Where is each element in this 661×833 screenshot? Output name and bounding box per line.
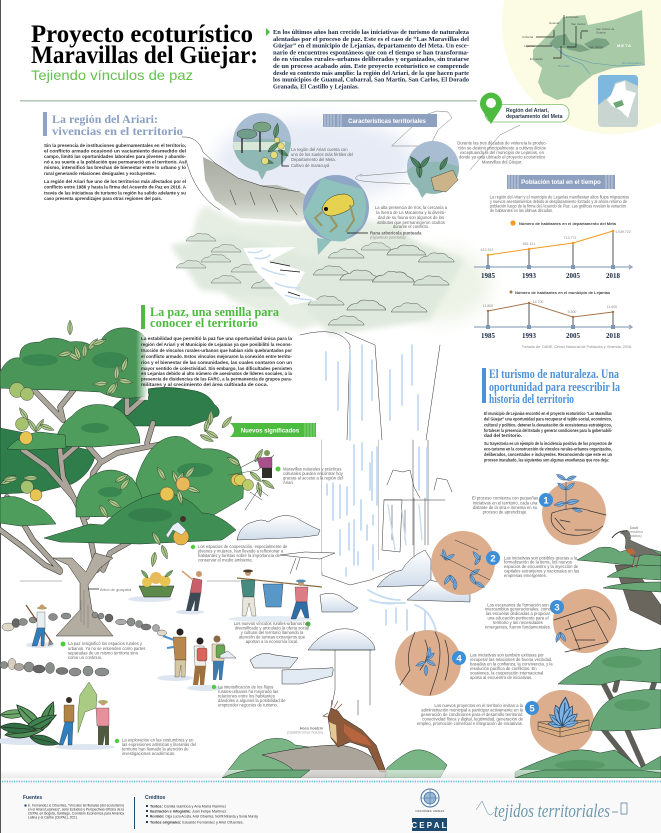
intro text: alentadas por el proceso de paz. Este es el caso de “Las Maravillas del [273, 36, 469, 43]
caption [504, 556, 579, 578]
text: población: La región del Ariari y el municipio de Lejanías manifiestan altos flujos migratorios [490, 194, 629, 200]
text: La región del Ariari: caso presenta aprendizajes para otras regiones del país. [44, 196, 163, 202]
step 4 [395, 630, 553, 696]
caption: intercambios generacionales, como [485, 606, 552, 612]
caption: ríos: durante el conflicto. [393, 224, 429, 229]
chart: Lejanías [474, 290, 632, 349]
tejidos territoriales logo: tejidos territoriales [494, 801, 610, 822]
caption: Los nuevos proyectos en el territorio invitan a la [434, 703, 524, 708]
map: rivers [552, 45, 645, 74]
caption: guava tree: Árbol de guayaba [100, 587, 132, 592]
values: 412.312 [481, 248, 493, 252]
plant [554, 473, 583, 514]
caption: proceso de aprendizaje. [483, 510, 527, 514]
caption: maravillas: culturales pueden encontrar hoy [283, 471, 344, 476]
clouds outlines [355, 111, 520, 184]
créditos: Textos originales: Eduardo Fernández y Ariel Cifuentes. [150, 820, 244, 824]
years [481, 332, 620, 340]
step 5 [417, 690, 594, 754]
years: 1985 [481, 332, 496, 340]
CEPAL logo [411, 818, 449, 831]
caption: Los escenarios de formación son [487, 602, 549, 608]
caption: aporta al encuentro de iniciativas. [470, 675, 532, 680]
caption: empresas emergentes. [504, 573, 547, 578]
créditos [145, 795, 258, 824]
caption: ríos [375, 205, 448, 229]
fuentes: en el Ariari (Lejanías)”, serie Estudios y Perspectivas-Oficina de la [28, 808, 125, 812]
caption: décadas de violencia: exceptuando la del municipio de Lejanías, en [460, 150, 545, 155]
intro text [266, 28, 470, 90]
title [31, 19, 258, 83]
caption: El proceso comienza con pequeñas [472, 496, 538, 500]
values: 9.300 [568, 310, 576, 314]
map: labels: El Dorado [566, 15, 579, 19]
map: labels: San Carlos [571, 22, 586, 26]
caption: intensificación: La intensificación de los flujos [218, 684, 273, 690]
caption: vínculos: Los nuevos vínculos rurales-urbanos han [234, 621, 311, 626]
text: La paz: rios y el bienestar de las comunidades, las cuales contaron con un [141, 360, 292, 366]
person digging [26, 604, 54, 646]
caption: maravillas [276, 466, 344, 485]
map: Ariari region [549, 34, 590, 52]
heading: La región del Ariari: vivencias en el territorio [52, 124, 183, 138]
lower hills [190, 205, 430, 330]
intro text: do en vínculos rurales–urbanos deliberados y organizados, sin tratarse [273, 56, 469, 63]
person in purple [257, 450, 272, 478]
basket of guavas [139, 569, 174, 597]
map: Colombia inset [598, 75, 638, 127]
intro text: desde su contexto más amplio: la región del Ariari, de la que hacen parte [273, 70, 469, 77]
footer [1, 770, 661, 833]
title: Maravillas del Güejar: [31, 40, 258, 69]
caption: resignificó: separadas de un mismo territorio sino [68, 650, 139, 656]
caption: una educación pertinente para el [488, 616, 549, 620]
caption: vínculos: diversificado y articulado la oferta social [235, 626, 309, 630]
ibis tree [577, 526, 661, 625]
badge [452, 651, 466, 665]
years: 2005 [566, 272, 580, 280]
map: labels: San Martín [589, 45, 604, 49]
créditos: Ilustración e infografía: Juan Felipe Martínez [150, 810, 226, 814]
pin label: Región del Ariari, [506, 108, 549, 114]
banner: características territoriales [323, 114, 437, 127]
axis [474, 325, 632, 329]
text: El turismo: dad del territorio. [484, 433, 523, 439]
text: El turismo: Su trayectoria es un ejemplo de la incidencia positiva de los proyectos de [484, 441, 612, 447]
step 1 [472, 473, 606, 545]
text: La paz: en Lejanías debido al alto número de asesinatos de líderes sociales, a la [141, 371, 292, 377]
CEPAL logo: CEPAL [411, 821, 449, 830]
caption: exploración [115, 738, 196, 756]
caption: intensificación: dándoles a algunos la posibilidad de [218, 698, 286, 703]
caption: resignificó: urbanos. Ya no se entienden como partes [68, 646, 145, 651]
caption: intensificación: relaciones entre los habitantes [218, 694, 275, 698]
step 2 [431, 531, 579, 595]
text: La región del Ariari [44, 143, 187, 202]
caption: maravillas: gracias al acceso a la región del [283, 476, 343, 480]
caption: cooperación [191, 544, 288, 562]
years: 2005 [566, 332, 580, 340]
caption: hoatzin [287, 726, 324, 734]
small rocks with plants [220, 488, 268, 658]
chart: Meta [474, 220, 632, 280]
caption: espacios de encuentro y la inyección de [504, 564, 579, 569]
ibis label: Coclí [630, 526, 639, 530]
banner: población total: Población total en el tiempo [521, 180, 601, 186]
caption: vínculos: aportan a la economía local. [246, 639, 298, 644]
circle: cultivos [233, 113, 353, 180]
page edge [0, 0, 1, 833]
map: labels: Río Guayabero [622, 61, 642, 65]
lower right tree [515, 648, 661, 778]
ibis bird [612, 530, 661, 568]
text: El turismo: cultural y político, detener la devastación de ecosistemas estratégicos, [484, 422, 612, 428]
illustration: waterfall [237, 332, 470, 715]
caption: resignificó: como un continuo. [68, 655, 102, 660]
caption [470, 652, 553, 680]
text: La región del Ariari: La región del Ariari fue uno de los territorios más afectados por el [44, 179, 187, 185]
text: La paz: militares y al crecimiento del área cultivada de coca. [141, 382, 269, 388]
large leaves plant [0, 700, 60, 748]
hikers [193, 636, 225, 685]
legend: Número de habitantes en el departamento del Meta [519, 221, 617, 226]
map: labels: Lejanías [524, 44, 535, 48]
hoatzin bird [323, 700, 386, 772]
ibis label [625, 526, 643, 538]
caption: recuperar las relaciones de buena vecindad, [470, 657, 552, 662]
title: Proyecto ecoturístico [31, 19, 253, 48]
pin label [485, 104, 569, 122]
heading: La paz: conocer el territorio [150, 316, 258, 330]
map: labels: Guaroa [596, 30, 606, 34]
caption: generación de condiciones para el desarrollo territorial: [421, 712, 523, 717]
text: El turismo: eco-turismo en la construcción de vínculos rurales-urbanos organizados, [484, 446, 612, 452]
fuentes [23, 795, 125, 820]
caption [472, 496, 538, 514]
caption: resolución pacífica de conflictos. En [470, 666, 537, 671]
banner: población total [507, 175, 615, 189]
caption: Las iniciativas son también exitosas por [470, 652, 544, 658]
trunk [53, 553, 113, 636]
caption: las escuelas dedicadas a propiciar [486, 611, 551, 616]
river pools [368, 590, 437, 635]
caption: intensificación: rurales-urbanos ha mejorado las [218, 689, 278, 694]
heading: El turismo: oportunidad para reescribir la [489, 379, 620, 394]
caption: basadas en la confianza, la convivencia, y la [470, 662, 553, 666]
years: 2018 [606, 272, 620, 280]
intro text: de un proceso acabado aún. Este proyecto ecoturístico se comprende [273, 63, 469, 70]
years: 2018 [606, 332, 620, 340]
person with guava [166, 516, 186, 538]
circle: frog [303, 175, 422, 255]
leader line [282, 150, 289, 166]
intro text: nario de encuentros espontáneos que con el tiempo se han transforma- [273, 49, 469, 56]
map: labels: Cubarral [522, 35, 533, 39]
text: La región del Ariari: nó a su suerte a la población que permaneció en el territorio. Así [44, 159, 187, 165]
caption: ríos: la Sierra de La Macarena y la diversi- [376, 210, 446, 215]
intro text: los municipios de Guamal, Cubarral, San Martín, San Carlos, El Dorado [273, 77, 469, 84]
map: labels: Guamal [549, 21, 559, 25]
values: 713.772 [564, 236, 576, 240]
badge: 2 [490, 554, 496, 564]
illustration: upper landscape [170, 111, 520, 335]
caption: emergentes, fueron fundamentales. [485, 624, 551, 630]
caption: cooperación: habitantes y turistas sobre la importancia de [198, 553, 281, 558]
rocks and clouds [237, 515, 320, 540]
map panel [502, 0, 661, 134]
badge [486, 551, 500, 565]
caption: décadas de violencia: donde ya está ubicado el proyecto ecoturístico [459, 154, 546, 160]
text: El turismo: deliberados, concertados e incluyentes. Reconociendo que este es un [484, 452, 612, 458]
text: La paz: el conflicto armado. Estos vínculos mejoraron la conexión entre territo- [141, 354, 292, 360]
caption [485, 602, 552, 630]
years: 1993 [522, 332, 536, 340]
location pin [480, 93, 569, 124]
caption: Las iniciativas son posibles gracias a la [504, 556, 578, 560]
text: La región del Ariari: campo, limitó las oportunidades laborales para jóvenes y abando- [44, 154, 186, 160]
caption: resignificó: La paz resignificó los espacios rurales y [68, 641, 143, 646]
fuentes: Latina y el Caribe (CEPAL), 2021. [28, 816, 78, 820]
caption: cultivos: La región del Ariari cuenta con [291, 147, 348, 152]
seedbed [538, 720, 589, 737]
person arms up [182, 571, 202, 611]
caption: intensificación [212, 684, 286, 708]
heading: El turismo [482, 366, 620, 406]
years [481, 272, 620, 280]
frog label: Rana arborícola punteada [370, 230, 422, 236]
fuentes: CEPAL en Bogotá, Santiago, Comisión Económica para América [28, 812, 125, 816]
text: La paz: región del Ariari y el Municipio de Lejanías ya que posibilitó la recons- [141, 342, 292, 348]
text: La región del Ariari: conflicto entre 1986 y hasta la firma del Acuerdo de Paz en 2016. A [44, 185, 186, 191]
circle: plant basket [407, 141, 459, 198]
intro text: Granada, El Castillo y Lejanías. [273, 83, 359, 90]
guava fruits [10, 382, 254, 545]
step 3 [485, 589, 617, 653]
caption: iniciativas en el territorio, cada una [473, 500, 538, 506]
text fade [136, 326, 148, 400]
caption: hoatzin: Hoco hoatzin [300, 726, 324, 730]
text: La paz: presencia de disidencias de las FARC, a la permanencia de grupos para- [141, 376, 292, 382]
caption: cultivos [291, 147, 353, 168]
map: labels: El Castillo [530, 57, 543, 61]
line [488, 303, 613, 317]
values: 14.700 [533, 300, 543, 304]
caption: cultivos: Cultivo de maracuyá [291, 163, 330, 168]
caption: distante de la otra e inmersa en su [473, 505, 538, 510]
foliage front [0, 328, 146, 398]
river [243, 247, 318, 305]
heading: La región del Ariari: La región del Ariari: [52, 112, 158, 126]
caption: décadas de violencia: ción se destinó principalmente a cultivos ilícitos [458, 146, 546, 150]
text: población: población luego de la firma del Acuerdo de Paz. Las gráficas revelan la variación [490, 204, 627, 208]
heading: El turismo: El turismo de naturaleza. Una [489, 366, 619, 381]
heading: La paz: La paz, una semilla para [150, 305, 280, 319]
right tier rock [382, 470, 452, 560]
values: 11.800 [483, 304, 493, 308]
caption: resignificó [60, 641, 145, 660]
créditos: Revisión: Olga Lucía Acosta, Ariel Cifuentes, Nohfli Miranda y Sonia Murray [150, 814, 258, 818]
plants [440, 540, 490, 590]
banner: nuevos significados: Nuevos significados [241, 428, 300, 434]
badge: 1 [543, 496, 549, 506]
caption: maravillas: Maravillas naturales y prácticas [283, 466, 341, 472]
caption: cooperación: Los espacios de cooperación, especialmente de [198, 544, 288, 549]
people with leaf [59, 682, 109, 745]
heading: La región del Ariari [43, 112, 183, 138]
illustration: guava tree [0, 320, 276, 636]
intro text: Güejar” en el municipio de Lejanías, departamento del Meta. Un esce- [273, 43, 469, 50]
caption: ocasiones, la cooperación internacional [470, 670, 543, 676]
pin label: departamento del Meta [506, 114, 563, 120]
map: San Martín zone [584, 38, 610, 49]
text: La paz: mayor sentido de colectividad. Sin embargo, las dificultades persisten [141, 366, 292, 372]
caption: cultivos: uno de los suelos más fértiles del [291, 152, 353, 157]
caption: conectividad física y digital, legitimidad, generación de [422, 716, 524, 722]
map: labels: San Carlos de [596, 27, 615, 31]
ibis label: caudatus) [626, 534, 642, 538]
caption: exploración: investigaciones académicas. [122, 751, 175, 756]
caption: cooperación: conservar el medio ambiente. [198, 558, 253, 562]
bottom centre trees with hoatzin [222, 700, 447, 778]
stones [0, 612, 166, 676]
map: labels: META [617, 43, 632, 48]
caption: intensificación: emprender negocios de turismo. [218, 702, 278, 708]
branches [0, 382, 167, 572]
ground lines and shadows [0, 581, 312, 750]
caption: vínculos [234, 621, 311, 644]
caption: décadas de violencia: Durante las tres décadas de violencia la produc- [457, 140, 547, 146]
text: La región del Ariari: rural generando relaciones desiguales y excluyentes. [44, 171, 157, 177]
water streaks [326, 345, 427, 576]
caption: capitales extranjeros y nacionales en las [504, 568, 579, 574]
header divider [20, 100, 477, 102]
badge [525, 701, 539, 715]
caption: décadas de violencia: Maravillas del Güejar. [482, 160, 522, 164]
cliffs [300, 332, 440, 585]
text: El turismo: proceso inacabado, las siguientes son algunas enseñanzas que nos deja: [484, 458, 609, 464]
caption: hoatzin: (Opisthocomus hoazin) [287, 730, 323, 734]
banner: nuevos significados [230, 423, 316, 437]
carriers with bucket [237, 570, 322, 619]
text: población: y nuevos asentamientos debido al desplazamiento forzado y al ahora retorno de [490, 199, 628, 204]
subtitle: Tejiendo vínculos de paz [31, 67, 193, 83]
text: La región del Ariari: mismo, intensificó las brechas de bienestar entre lo urbano y lo [44, 165, 186, 171]
caption: vínculos: atención de turistas extranjeros que [239, 634, 306, 640]
fuentes: E. Fernández & Cifuentes, “Vínculos territoriales (del ecoturismo) [28, 804, 124, 808]
caption: exploración: territorio han llamado la atención de [122, 746, 189, 752]
map: labels: Río Ariari [558, 64, 570, 68]
badge: 4 [456, 654, 462, 664]
map: labels [522, 15, 642, 68]
caption: exploración: las expresiones artísticas y literarias del [122, 742, 196, 747]
line [488, 231, 613, 255]
heading: La paz [141, 305, 280, 330]
ibis label: (Theristicus [625, 530, 643, 534]
low rocks [250, 653, 298, 668]
text: La paz: La estabilidad que permitió la paz fue una oportunidad única para la [141, 336, 292, 342]
caption: cooperación: jóvenes y mujeres, han llevado a reflexionar a [197, 548, 284, 554]
foliage back [108, 387, 219, 426]
text: El turismo: fortalecer la presencia del Estado y generar condiciones para la gobernabili- [484, 428, 612, 434]
values [481, 230, 631, 252]
caption: exploración: La exploración en las costumbres y en [122, 738, 194, 742]
caption: ríos: dad de su fauna son algunos de los [378, 215, 444, 220]
UN logo: NACIONES UNIDAS [416, 809, 444, 813]
caption: territorio y las necesidades [493, 620, 543, 625]
caption: formalización de la tierra, los nuevos [504, 560, 572, 564]
values: 561.121 [523, 242, 535, 246]
axis [474, 265, 632, 269]
guide [163, 628, 186, 677]
caption: cultivos: Departamento del Meta. [291, 157, 336, 162]
UN logo [416, 789, 444, 813]
fuentes: Fuentes [23, 795, 42, 801]
map: municipality leaders [526, 15, 588, 58]
source: Tomado de: DANE, Censo Nacional de Población y Vivienda, 2018. [522, 345, 632, 349]
text: La región del Ariari: Sin la presencia de instituciones gubernamentales en el territorio, [44, 143, 187, 149]
values: 11.600 [607, 305, 617, 309]
values [483, 300, 617, 314]
créditos: Créditos [145, 795, 166, 801]
banner: características territoriales: Características territoriales [348, 119, 427, 125]
years: 1985 [481, 272, 496, 280]
caption: administración municipal a participar activamente en la [421, 708, 524, 712]
text: El turismo: El municipio de Lejanías encontró en el proyecto ecoturístico “Las Maravillas [484, 411, 612, 417]
frog leader [347, 232, 368, 234]
years: 1993 [522, 272, 536, 280]
caption: ríos: La alta presencia de ríos, la cercanía a [375, 205, 448, 210]
text: El turismo [484, 411, 612, 464]
caption: maravillas: Ariari. [283, 480, 294, 485]
mountain ridge line [182, 137, 300, 215]
caption [417, 703, 524, 726]
text: población [490, 194, 629, 213]
map: Meta department [533, 10, 645, 100]
intro text: En los últimos años han crecido las iniciativas de turismo de naturaleza [273, 29, 470, 36]
circle: frog: (Hypsiboas punctatus) [370, 236, 406, 240]
text: población: de habitantes en las últimas décadas. [490, 208, 553, 213]
text: La paz [141, 336, 292, 388]
plant [547, 697, 580, 729]
créditos: Textos: Camila Gamboa y Ana María Ramírez [150, 804, 226, 808]
caption: décadas de violencia [457, 140, 547, 164]
text: La región del Ariari: el conflicto armado ocasionó un vaciamiento desmedido del [44, 148, 187, 154]
guava sprigs [0, 320, 276, 567]
heading: El turismo: historia del territorio [489, 391, 574, 406]
text: La paz: trucción de vínculos rurales-urbanos que habían sido quebrantados por [141, 348, 292, 354]
badge: 3 [554, 602, 560, 614]
mountain [203, 157, 330, 222]
legend: Número de habitantes en el municipio de Lejanías [515, 290, 611, 295]
values: 1.039.722 [615, 230, 631, 234]
caption: vínculos: y cultural del territorio llamando la [241, 630, 304, 635]
badge: 5 [529, 704, 535, 714]
text: El turismo: del Güejar” una oportunidad para recuperar el tejido social, económico, [484, 416, 612, 422]
caption: empleo, promoción comercial e integración de iniciativas. [417, 721, 523, 726]
caption: ríos: atributos que permanecieron ocultos [377, 220, 445, 225]
text: La región del Ariari: través de las iniciativas de turismo la región ha salido adelante y su [44, 190, 186, 196]
forest canopy [170, 233, 465, 335]
